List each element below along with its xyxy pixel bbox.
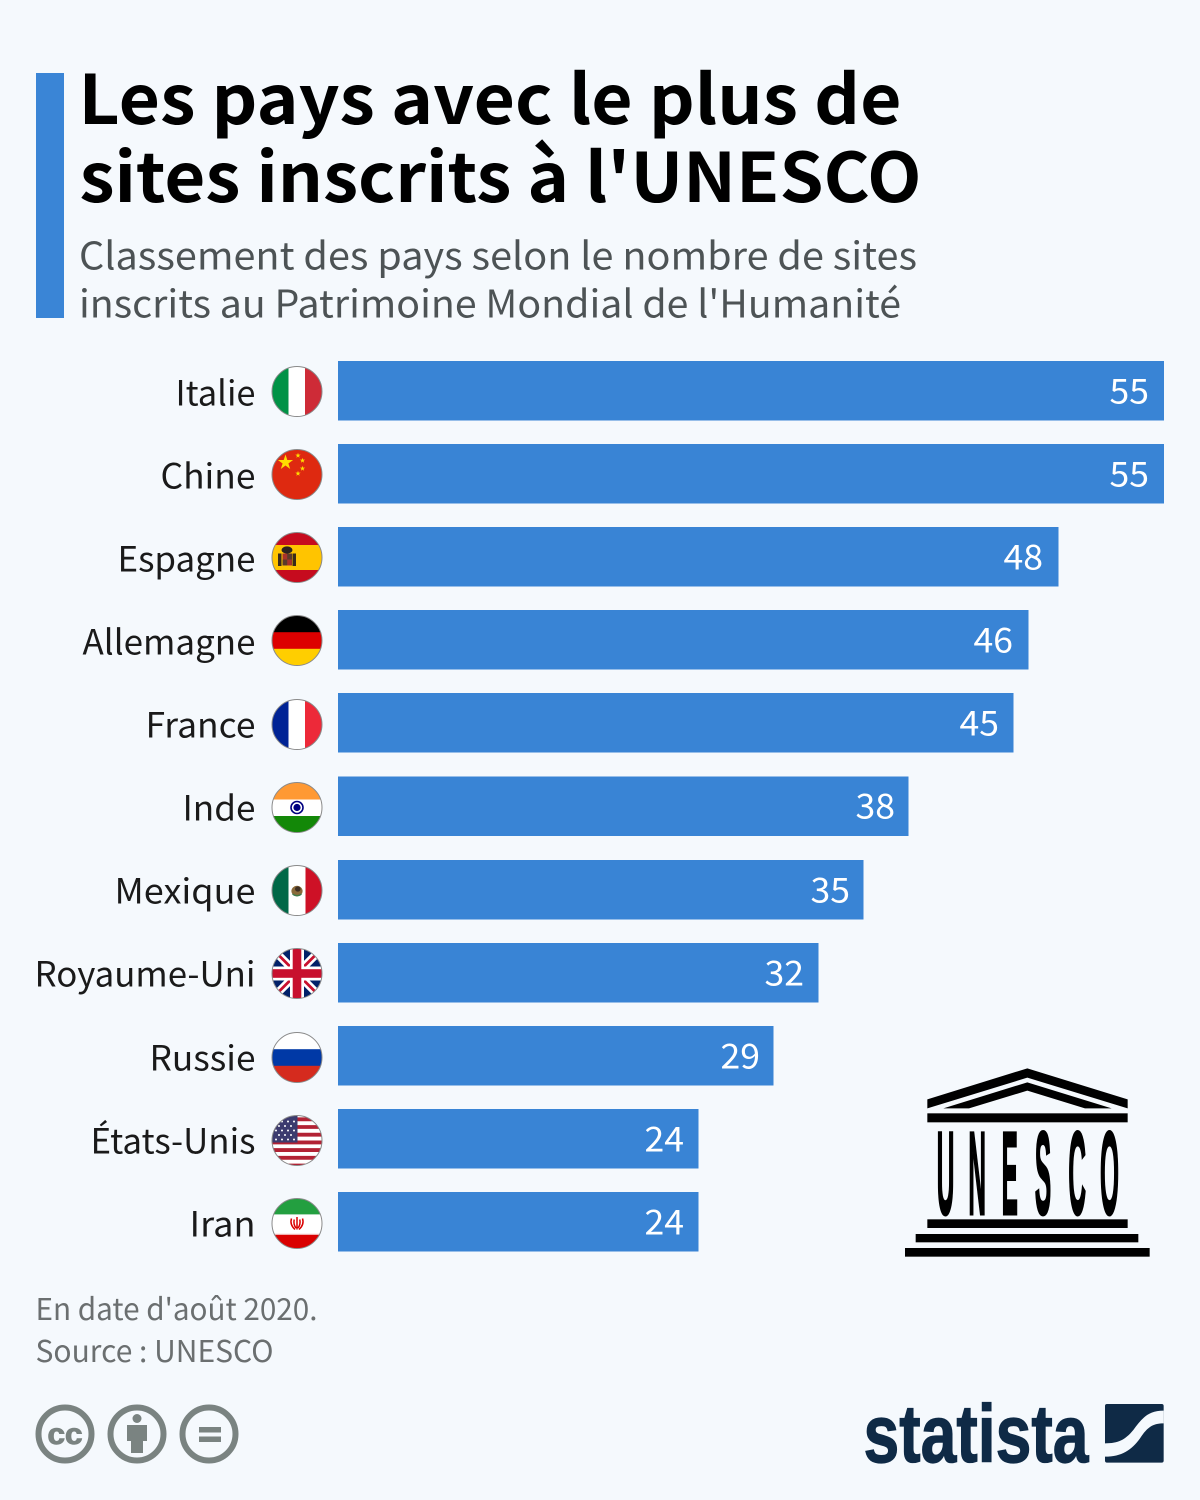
row: Italie: Italie bbox=[176, 366, 256, 416]
subtitle: Classement des pays selon le nombre de sites bbox=[79, 226, 917, 280]
title: Les pays avec le plus de bbox=[78, 45, 902, 144]
row: Chine: 55 bbox=[1110, 446, 1149, 496]
row: Inde: Inde bbox=[182, 780, 256, 830]
icon: statista mark bbox=[1105, 1404, 1164, 1463]
icon: cc bbox=[38, 1408, 92, 1460]
source note: En date d'août 2020. bbox=[36, 1285, 318, 1329]
row: Allemagne bbox=[82, 610, 1028, 670]
row: Iran bbox=[190, 1192, 698, 1252]
row: Chine: Chine bbox=[160, 448, 256, 498]
row: États-Unis: États-Unis bbox=[90, 1114, 256, 1164]
row: Iran: 24 bbox=[644, 1194, 684, 1244]
accent bar bbox=[36, 73, 64, 318]
icon: UNESCO logo bbox=[905, 1068, 1150, 1257]
row: Allemagne: Allemagne bbox=[82, 614, 256, 664]
title: sites inscrits à l'UNESCO bbox=[80, 123, 922, 222]
row: Iran: Iran bbox=[190, 1196, 256, 1246]
row: Mexique: Mexique bbox=[114, 864, 256, 914]
row: Mexique bbox=[114, 860, 864, 920]
row: Espagne bbox=[118, 527, 1058, 586]
row: Italie: 55 bbox=[1110, 364, 1149, 414]
row: Inde: 38 bbox=[856, 778, 895, 828]
row: États-Unis: 24 bbox=[644, 1112, 684, 1162]
title bbox=[78, 45, 922, 222]
row: États-Unis bbox=[90, 1109, 698, 1168]
icon: cc: cc bbox=[48, 1418, 82, 1451]
row: Mexique: 35 bbox=[810, 862, 850, 912]
bar chart bbox=[34, 361, 1164, 1252]
row: Royaume-Uni bbox=[34, 943, 818, 1002]
row: Chine bbox=[160, 444, 1164, 504]
subtitle: inscrits au Patrimoine Mondial de l'Humanité bbox=[79, 274, 901, 328]
icon: UNESCO logo: UNESCO bbox=[937, 1109, 1119, 1240]
row: Allemagne: 46 bbox=[974, 612, 1013, 662]
row: Royaume-Uni: 32 bbox=[764, 946, 804, 996]
row: France bbox=[146, 693, 1014, 752]
statista logo: statista bbox=[864, 1389, 1090, 1480]
row: Royaume-Uni: Royaume-Uni bbox=[34, 946, 256, 996]
row: Russie bbox=[150, 1026, 774, 1086]
icon: attribution bbox=[110, 1408, 164, 1460]
source note: Source : UNESCO bbox=[36, 1327, 274, 1371]
icon: creative commons licence bbox=[38, 1408, 236, 1460]
subtitle bbox=[79, 226, 917, 328]
row: Inde bbox=[182, 776, 908, 836]
icon: no derivatives bbox=[182, 1408, 236, 1460]
row: France: 45 bbox=[960, 696, 999, 746]
row: Espagne: 48 bbox=[1004, 530, 1043, 580]
row: Italie bbox=[176, 361, 1164, 420]
row: Russie: 29 bbox=[720, 1028, 760, 1078]
row: France: France bbox=[146, 698, 256, 748]
row: Russie: Russie bbox=[150, 1030, 256, 1080]
source note bbox=[36, 1285, 318, 1371]
row: Espagne: Espagne bbox=[118, 532, 255, 582]
